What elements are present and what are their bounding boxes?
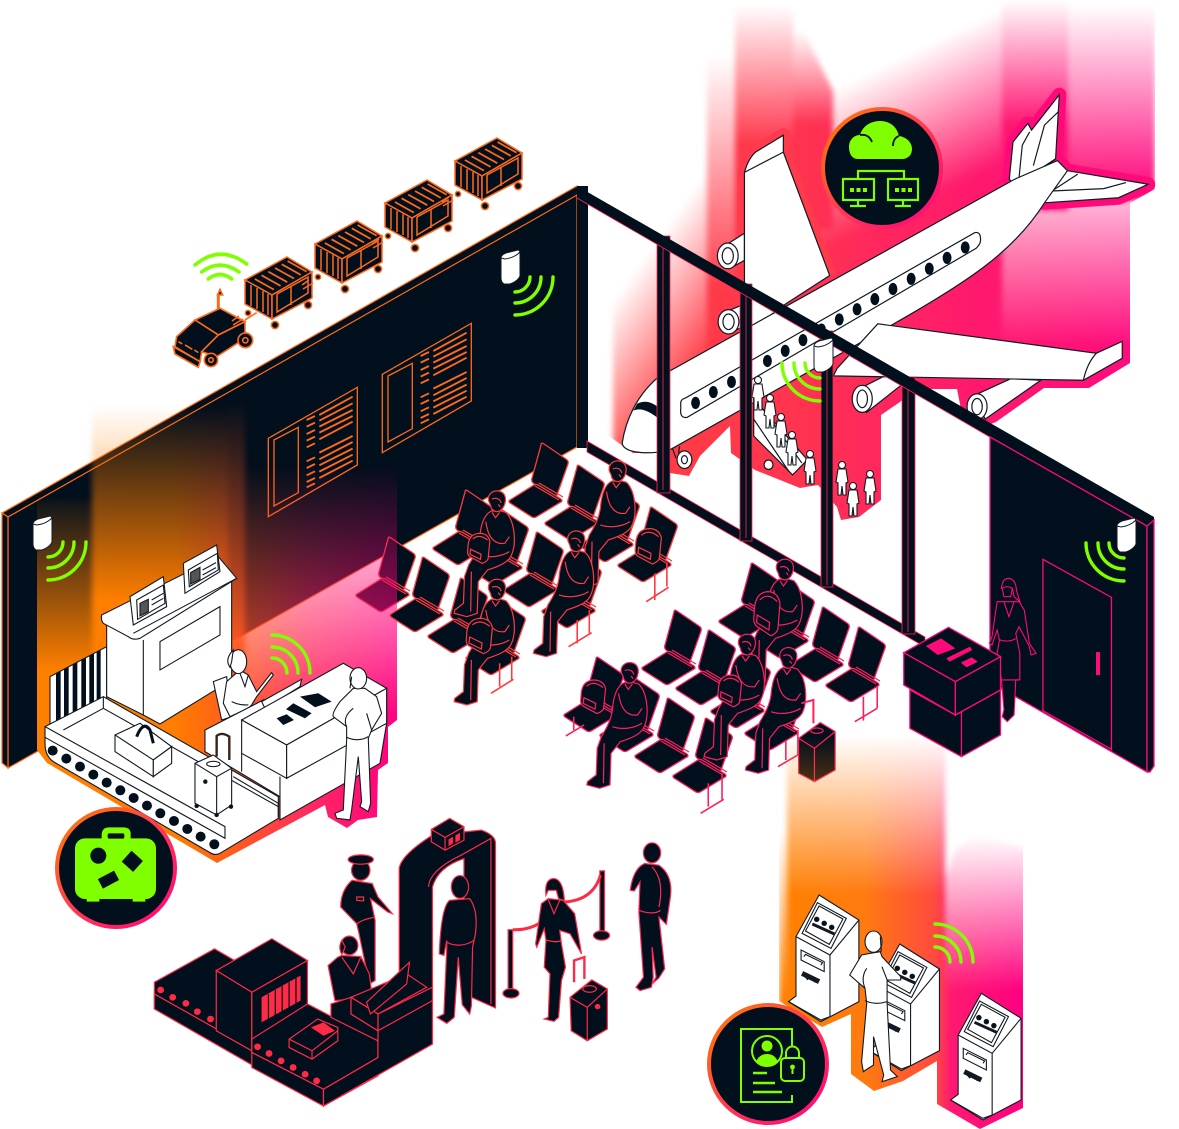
badge: luggage <box>57 809 175 927</box>
access point left wall <box>33 516 52 550</box>
boarding passengers <box>752 376 876 516</box>
x-ray baggage scanner <box>154 939 432 1106</box>
access point right wall <box>1117 518 1136 552</box>
plane halo: pink glow behind aircraft <box>600 0 1155 560</box>
counter pillar <box>101 557 237 724</box>
passenger one with backpack <box>454 491 514 617</box>
badge: cloud network <box>823 109 941 227</box>
passenger four with backpack <box>454 579 514 705</box>
airplane <box>622 95 1148 516</box>
check-in kiosks <box>788 895 1021 1120</box>
passenger six with backpack <box>704 634 764 760</box>
suitcase at desk <box>195 734 233 817</box>
nose gear <box>677 451 692 468</box>
suitcase icon <box>75 827 156 902</box>
laptop <box>366 962 409 1014</box>
stanchions and rope <box>503 871 610 998</box>
low desk <box>205 688 387 820</box>
network monitors icon <box>843 171 918 206</box>
baggage cart two <box>302 221 382 293</box>
passenger seven <box>745 648 806 773</box>
wifi signal right wall <box>1086 543 1124 581</box>
door handle <box>1096 652 1100 675</box>
bag on conveyor <box>115 723 172 777</box>
waiting seats group two <box>564 563 885 813</box>
baggage cart one <box>232 257 312 329</box>
check-in glow: orange to magenta <box>37 400 397 870</box>
window strip <box>681 232 981 418</box>
plane glow outline <box>744 95 1148 333</box>
security attendant <box>536 879 582 1021</box>
wifi signal check-in <box>272 635 310 673</box>
passenger in queue <box>630 843 671 991</box>
baggage tug with wifi <box>173 254 257 367</box>
window wall: beam, floor rail and mullions <box>577 186 1154 647</box>
conveyor belt <box>45 697 278 854</box>
far engines <box>622 95 1148 475</box>
document and padlock icon <box>741 1029 804 1102</box>
scanner tray bag <box>289 1019 338 1059</box>
backpack on seat <box>635 529 661 564</box>
departure board right <box>382 323 471 453</box>
security figures, queue and stanchions <box>328 855 476 1023</box>
attendant suitcase <box>570 957 607 1041</box>
monitor one <box>130 577 167 625</box>
kiosk one <box>788 895 859 1022</box>
near engines <box>859 370 907 412</box>
operator desk <box>323 987 432 1106</box>
check-in area: conveyor, counter, staff and passenger <box>45 545 387 854</box>
wifi signal kiosk <box>935 924 973 962</box>
queue stanchions, attendant, suitcase and passenger <box>503 843 671 1041</box>
passenger eight with backpack <box>581 663 647 788</box>
tail fins <box>1009 95 1059 186</box>
waiting seats group one <box>390 443 677 693</box>
gate agent <box>989 578 1036 722</box>
kiosk glow: orange to magenta <box>779 735 1023 1129</box>
access point on window beam <box>814 338 833 372</box>
monitor two <box>183 545 220 593</box>
gate podium <box>904 627 1000 757</box>
passenger in arch <box>437 876 476 1023</box>
wifi signal back wall <box>515 277 553 315</box>
far-left seat under glow <box>356 537 415 612</box>
door <box>1043 559 1111 749</box>
horizontal stabiliser <box>1017 171 1148 204</box>
seated security operator <box>328 936 372 1001</box>
boarding stairs <box>754 399 807 475</box>
seated passengers <box>454 461 661 705</box>
passenger three <box>533 531 594 657</box>
passenger at check-in <box>333 668 382 820</box>
cloud icon <box>849 121 912 159</box>
desk monitor <box>262 679 302 708</box>
baggage cart four <box>442 138 522 210</box>
baggage cart three <box>372 180 452 252</box>
departure board left <box>268 387 357 517</box>
right wall with door <box>990 437 1154 772</box>
kiosk two <box>869 944 939 1071</box>
check-in agent <box>213 650 273 720</box>
stripe panel <box>50 647 107 733</box>
security guard <box>341 855 392 984</box>
back wall: dark terminal wall <box>2 186 588 768</box>
fuselage <box>622 161 1067 453</box>
suitcase by seats <box>799 700 835 782</box>
security arch <box>399 818 496 1041</box>
main desk block <box>233 663 387 820</box>
passenger two <box>575 461 635 587</box>
kiosk three <box>951 993 1021 1120</box>
near wing <box>833 324 1122 380</box>
wifi signal window <box>782 363 820 401</box>
passenger five with backpack <box>742 559 802 685</box>
far wing <box>744 135 830 335</box>
badge: passport identity <box>709 1005 827 1123</box>
access point back wall <box>501 250 520 284</box>
wifi signal left wall <box>48 542 86 580</box>
arch sensor box <box>431 818 464 850</box>
passenger at kiosk <box>850 931 901 1082</box>
